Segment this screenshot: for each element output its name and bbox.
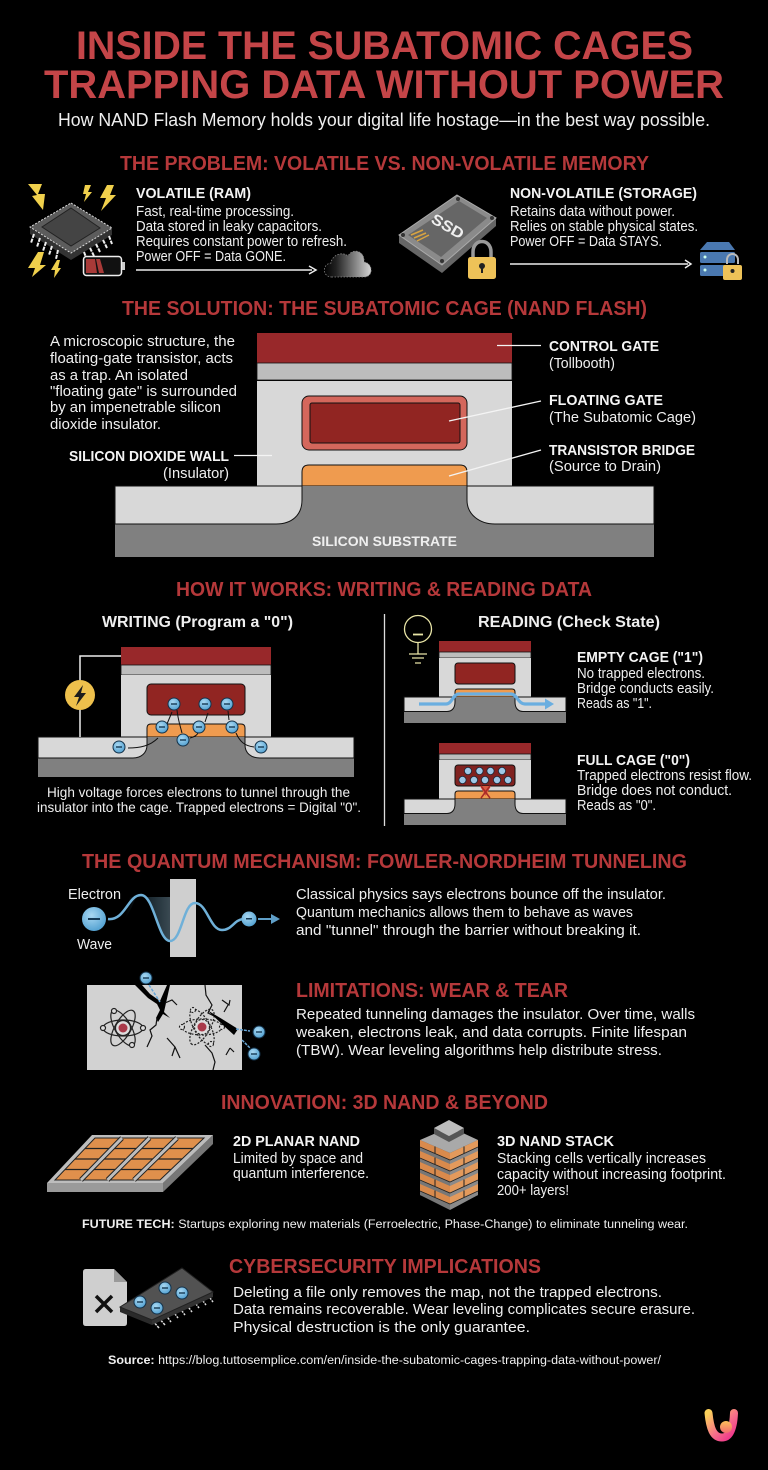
- text: solution description: A microscopic structure, the: [50, 334, 235, 350]
- text: volatile: VOLATILE (RAM): [136, 185, 251, 202]
- icon: low battery: [84, 256, 125, 276]
- text: 2D planar: [233, 1133, 369, 1182]
- silicon dioxide wall: [257, 363, 512, 487]
- heading: writing: WRITING (Program a "0"): [102, 614, 293, 631]
- text: 2D planar: quantum interference.: [233, 1166, 369, 1182]
- text: 3D stack: Stacking cells vertically increases: [497, 1151, 706, 1167]
- text: solution description: by an impenetrable silicon: [50, 400, 221, 416]
- diagram: tunneling wave: [68, 879, 280, 957]
- icon: server with lock: [700, 242, 742, 280]
- diagram: damaged insulator: [87, 972, 265, 1070]
- silicon substrate: [115, 486, 654, 557]
- text: 3D stack: 3D NAND STACK: [497, 1133, 614, 1150]
- text: cybersecurity: Deleting a file only removes the map, not the trapped electrons.: [233, 1284, 662, 1301]
- heading: innovation: INNOVATION: 3D NAND & BEYOND: [221, 1091, 548, 1114]
- text: 2D planar: 2D PLANAR NAND: [233, 1133, 360, 1150]
- text: source: Source: https://blog.tuttosemplice.com/en/inside-the-subatomic-cages-trapping-data-without-power/: [108, 1353, 662, 1367]
- text: non-volatile: Power OFF = Data STAYS.: [510, 234, 662, 250]
- heading: the problem: THE PROBLEM: VOLATILE VS. NON-VOLATILE MEMORY: [120, 152, 649, 175]
- icon: logo: [708, 1413, 734, 1438]
- text: full cage: Trapped electrons resist flow.: [577, 768, 752, 784]
- panel: writing: [37, 614, 361, 815]
- text: 3D stack: capacity without increasing footprint.: [497, 1167, 726, 1183]
- callout: floating gate: [449, 392, 696, 426]
- text: future tech: FUTURE TECH: Startups exploring new materials (Ferroelectric, Phase-Change) to eliminate tunneling wear.: [82, 1217, 688, 1231]
- text: solution description: "floating gate" is surrounded: [50, 384, 237, 400]
- text: full cage: [577, 752, 752, 814]
- callout: control gate: (Tollbooth): [549, 356, 615, 372]
- icon: ground bulb: [404, 616, 432, 663]
- transistor bridge: [302, 465, 467, 486]
- text: quantum description: Quantum mechanics allows them to behave as waves: [296, 904, 633, 921]
- text: cybersecurity: Data remains recoverable. Wear leveling complicates secure erasure.: [233, 1301, 695, 1318]
- text: solution description: [50, 334, 237, 433]
- text: empty cage: Bridge conducts easily.: [577, 681, 714, 697]
- text: non-volatile: Relies on stable physical states.: [510, 219, 698, 235]
- silicon substrate: SILICON SUBSTRATE: [312, 533, 457, 549]
- icon: 3D NAND stack: [420, 1120, 478, 1210]
- title: INSIDE THE SUBATOMIC CAGES: [76, 24, 693, 68]
- text: writing caption: insulator into the cage. Trapped electrons = Digital "0".: [37, 800, 361, 815]
- callout: floating gate: FLOATING GATE: [549, 392, 663, 409]
- text: limitations: weaken, electrons leak, and data corrupts. Finite lifespan: [295, 1024, 687, 1041]
- subtitle: How NAND Flash Memory holds your digital life hostage—in the best way possible.: [58, 110, 710, 130]
- diagram: full cage: [404, 743, 566, 825]
- text: empty cage: Reads as "1".: [577, 696, 652, 712]
- text: limitations: [295, 1006, 695, 1059]
- heading: how it works: HOW IT WORKS: WRITING & READING DATA: [176, 578, 592, 601]
- icon: voltage source: [65, 656, 121, 737]
- diagram: writing transistor: [38, 647, 354, 777]
- text: empty cage: No trapped electrons.: [577, 666, 705, 682]
- diagram: floating-gate transistor: [115, 333, 654, 557]
- text: solution description: dioxide insulator.: [50, 417, 161, 433]
- floating gate: [302, 396, 467, 450]
- text: full cage: Reads as "0".: [577, 798, 656, 814]
- text: cybersecurity: Physical destruction is the only guarantee.: [233, 1319, 530, 1336]
- text: volatile: [136, 185, 347, 265]
- callout: transistor bridge: TRANSISTOR BRIDGE: [549, 442, 695, 459]
- text: full cage: Bridge does not conduct.: [577, 783, 732, 799]
- title: [44, 24, 724, 107]
- icon: RAM chip with lightning: [28, 184, 116, 278]
- control gate: [257, 333, 512, 363]
- icon: gold padlock: [468, 242, 496, 279]
- text: limitations: Repeated tunneling damages the insulator. Over time, walls: [296, 1006, 695, 1023]
- electrons: [113, 698, 267, 753]
- text: 3D stack: 200+ layers!: [497, 1183, 569, 1199]
- text: volatile: Data stored in leaky capacitors.: [136, 219, 322, 235]
- callout: transistor bridge: [449, 442, 695, 476]
- text: solution description: floating-gate transistor, acts: [50, 351, 233, 367]
- arrow: to server: [510, 260, 691, 268]
- text: limitations: (TBW). Wear leveling algorithms help distribute stress.: [296, 1042, 662, 1059]
- icon: SSD: SSD: [428, 211, 467, 243]
- text: 3D stack: [497, 1133, 726, 1199]
- text: writing caption: [37, 785, 361, 815]
- arrow: to cloud: [136, 266, 316, 274]
- text: non-volatile: NON-VOLATILE (STORAGE): [510, 185, 697, 202]
- text: non-volatile: [510, 185, 698, 250]
- text: quantum description: Classical physics says electrons bounce off the insulator.: [296, 886, 666, 903]
- title: TRAPPING DATA WITHOUT POWER: [44, 63, 724, 107]
- diagram: empty cage: [404, 641, 566, 723]
- callout: control gate: CONTROL GATE: [549, 338, 659, 355]
- text: 2D planar: Limited by space and: [233, 1151, 363, 1167]
- text: quantum description: [296, 886, 666, 939]
- text: empty cage: [577, 649, 714, 712]
- callout: silicon dioxide wall: [69, 448, 272, 482]
- callout: silicon dioxide wall: SILICON DIOXIDE WALL: [69, 448, 229, 465]
- text: volatile: Fast, real-time processing.: [136, 204, 294, 220]
- text: full cage: FULL CAGE ("0"): [577, 752, 690, 769]
- text: quantum description: and "tunnel" through the barrier without breaking it.: [296, 922, 641, 939]
- text: solution description: as a trap. An isolated: [50, 368, 188, 384]
- heading: quantum mechanism: THE QUANTUM MECHANISM: FOWLER-NORDHEIM TUNNELING: [82, 850, 687, 873]
- heading: limitations: LIMITATIONS: WEAR & TEAR: [296, 979, 568, 1002]
- text: cybersecurity: [233, 1284, 695, 1336]
- panel: reading: [404, 614, 752, 825]
- panel: non-volatile storage: [399, 185, 742, 280]
- heading: reading: READING (Check State): [478, 614, 660, 631]
- callout: floating gate: (The Subatomic Cage): [549, 410, 696, 426]
- callout: transistor bridge: (Source to Drain): [549, 459, 661, 475]
- diagram: tunneling wave: Wave: [77, 937, 112, 953]
- text: writing caption: High voltage forces electrons to tunnel through the: [47, 785, 350, 800]
- heading: the solution: THE SOLUTION: THE SUBATOMIC CAGE (NAND FLASH): [122, 297, 647, 320]
- panel: volatile RAM: [28, 184, 371, 278]
- callout: control gate: [497, 338, 659, 372]
- text: non-volatile: Retains data without power.: [510, 204, 675, 220]
- text: volatile: Requires constant power to refresh.: [136, 234, 347, 250]
- diagram: tunneling wave: Electron: [68, 887, 121, 903]
- icon: deleted file and chip: [83, 1268, 213, 1328]
- icon: fading cloud: [324, 251, 371, 277]
- icon: 2D planar NAND: [47, 1135, 213, 1192]
- callout: silicon dioxide wall: (Insulator): [163, 466, 229, 482]
- heading: cybersecurity: CYBERSECURITY IMPLICATIONS: [229, 1255, 541, 1278]
- text: volatile: Power OFF = Data GONE.: [136, 249, 286, 265]
- icon: SSD: [399, 195, 496, 273]
- text: empty cage: EMPTY CAGE ("1"): [577, 649, 703, 666]
